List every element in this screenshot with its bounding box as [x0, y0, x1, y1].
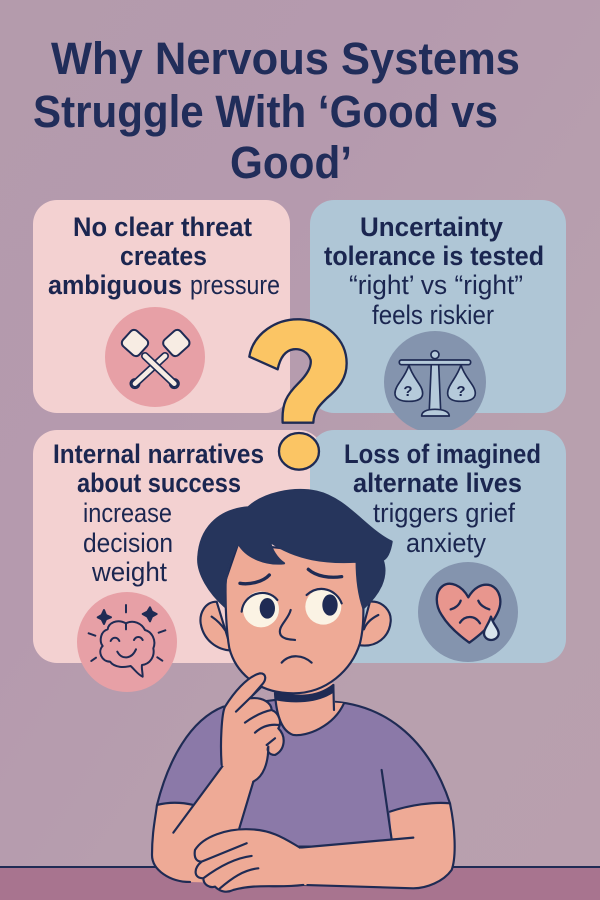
panel text: loss of imagined lives — [344, 439, 541, 558]
panel text: no clear threat: pressure — [190, 270, 280, 300]
icon: smiling brain — [77, 592, 177, 692]
panel text: no clear threat: No clear threat — [73, 212, 252, 242]
ears — [200, 602, 391, 651]
raised hand — [221, 673, 284, 782]
panel: loss of imagined lives — [310, 430, 566, 663]
panel text: internal narratives: Internal narratives — [53, 439, 264, 469]
mouth — [282, 656, 312, 663]
panel: internal narratives — [33, 430, 323, 692]
figure: worried person — [152, 490, 455, 892]
icon: crying heart — [418, 562, 518, 662]
table — [0, 866, 600, 900]
shirt — [157, 700, 450, 847]
icon: balance scale: ? — [403, 383, 413, 400]
panel text: uncertainty tolerance: tolerance is tested — [324, 241, 544, 271]
panel text: uncertainty tolerance: “right’ vs “right” — [349, 270, 523, 300]
panel text: loss of imagined lives: triggers grief — [373, 498, 516, 528]
eyes — [242, 589, 342, 627]
panel text: internal narratives: weight — [91, 557, 168, 587]
panel text: no clear threat: ambiguous — [48, 270, 182, 300]
face — [226, 543, 363, 693]
panel text: no clear threat — [48, 212, 280, 300]
panel text: internal narratives: increase — [83, 498, 172, 528]
icon: balance scale: ? — [456, 383, 466, 400]
panel text: internal narratives: about success — [77, 468, 241, 498]
panel text: internal narratives — [53, 439, 264, 587]
nose — [280, 610, 295, 640]
right forearm — [300, 770, 455, 888]
panel text: uncertainty tolerance — [324, 212, 544, 330]
icon: question mark — [249, 319, 347, 470]
panel text: loss of imagined lives: anxiety — [406, 528, 487, 558]
title: Good’ — [230, 137, 352, 188]
panel text: uncertainty tolerance: Uncertainty — [360, 212, 503, 242]
panel: uncertainty tolerance — [310, 200, 566, 433]
icon: balance scale — [384, 331, 486, 433]
panel text: internal narratives: decision — [83, 528, 173, 558]
title: Struggle With ‘Good vs — [33, 86, 498, 137]
title: Why Nervous Systems — [51, 33, 520, 84]
left arm — [152, 765, 307, 885]
title — [33, 33, 520, 188]
panel text: loss of imagined lives: alternate lives — [353, 468, 522, 498]
panel text: loss of imagined lives: Loss of imagined — [344, 439, 541, 469]
icon: crossed mallets — [105, 307, 205, 407]
panel text: no clear threat: creates — [120, 241, 207, 271]
panel text: uncertainty tolerance: feels riskier — [372, 300, 494, 330]
resting hand — [195, 829, 320, 892]
panel: no clear threat — [33, 200, 290, 413]
neck — [275, 683, 344, 735]
hair — [198, 490, 392, 608]
eyebrows — [240, 569, 342, 584]
